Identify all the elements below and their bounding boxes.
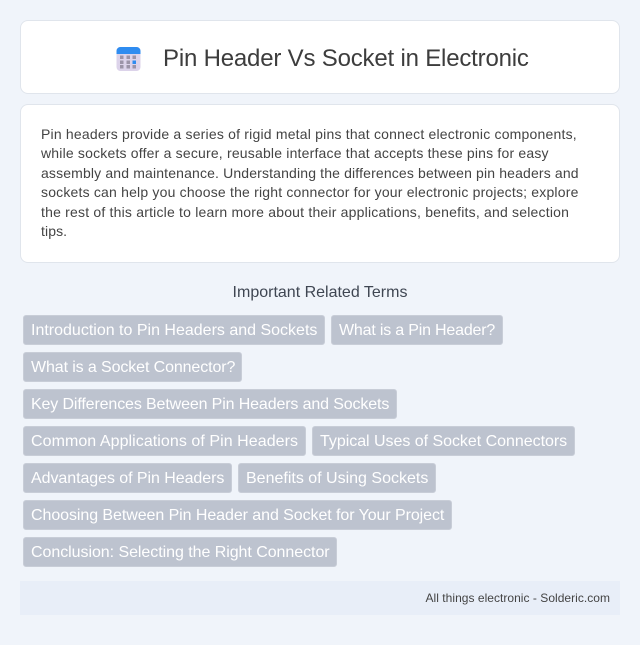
tag: Choosing Between Pin Header and Socket for Your Project xyxy=(31,507,444,524)
tag xyxy=(23,537,337,567)
tag xyxy=(312,426,575,456)
intro paragraph: the rest of this article to learn more about their applications, benefits, and selection xyxy=(41,204,569,220)
tag xyxy=(23,426,306,456)
tag: What is a Pin Header? xyxy=(339,322,495,339)
tag: Common Applications of Pin Headers xyxy=(31,433,298,450)
tag xyxy=(23,315,325,345)
intro paragraph: Pin headers provide a series of rigid metal pins that connect electronic components, xyxy=(41,126,577,142)
tag: What is a Socket Connector? xyxy=(31,359,235,376)
related terms tags xyxy=(23,315,575,567)
intro paragraph: sockets can help you choose the right connector for your electronic projects; explore xyxy=(41,184,579,200)
title card xyxy=(20,20,620,94)
intro paragraph: tips. xyxy=(41,223,67,239)
tag xyxy=(238,463,436,493)
tag: Typical Uses of Socket Connectors xyxy=(320,433,567,450)
title: Pin Header Vs Socket in Electronic xyxy=(163,45,529,72)
tag xyxy=(23,500,452,530)
tag: Conclusion: Selecting the Right Connector xyxy=(31,544,330,561)
intro paragraph: assembly and maintenance. Understanding the differences between pin headers and xyxy=(41,165,579,181)
intro text panel xyxy=(20,104,620,263)
section heading: Important Related Terms xyxy=(233,284,407,301)
tag: Advantages of Pin Headers xyxy=(31,470,224,487)
tag xyxy=(23,389,397,419)
footer bar xyxy=(20,581,620,615)
tag: Benefits of Using Sockets xyxy=(246,470,428,487)
icon: calendar grid xyxy=(116,47,140,71)
tag xyxy=(23,463,232,493)
tag: Introduction to Pin Headers and Sockets xyxy=(31,322,317,339)
intro paragraph: while sockets offer a secure, reusable interface that accepts these pins for easy xyxy=(41,145,549,161)
intro paragraph xyxy=(41,126,579,239)
tag: Key Differences Between Pin Headers and Sockets xyxy=(31,396,389,413)
footer credit: All things electronic - Solderic.com xyxy=(426,591,610,605)
tag xyxy=(331,315,503,345)
tag xyxy=(23,352,242,382)
